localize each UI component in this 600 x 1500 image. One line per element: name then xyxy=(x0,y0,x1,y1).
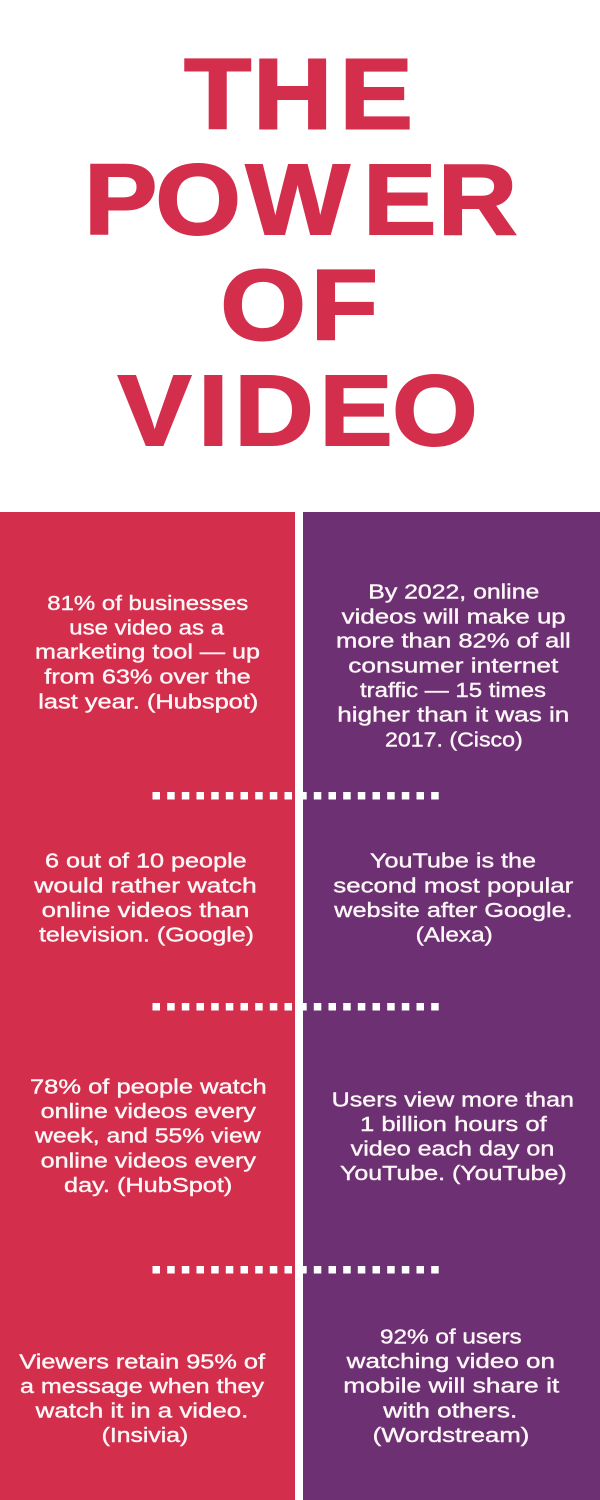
stat: businesses using video: marketing tool — up xyxy=(35,640,260,664)
title: OF xyxy=(220,250,378,361)
stat: rather watch online videos: would rather watch xyxy=(33,874,257,898)
stat: hours viewed on YouTube: 1 billion hours of xyxy=(360,1113,547,1136)
stat: weekly and daily viewers: online videos every xyxy=(41,1100,257,1123)
stat: hours viewed on YouTube: YouTube. (YouTube) xyxy=(340,1162,567,1185)
stat: rather watch online videos: online videos than xyxy=(42,899,249,922)
stat: businesses using video: last year. (Hubspot) xyxy=(38,690,258,713)
stat: weekly and daily viewers: online videos every xyxy=(41,1149,257,1172)
title: VIDEO xyxy=(118,356,478,467)
stat: message retention: watch it in a video. xyxy=(34,1400,248,1422)
stat: message retention: (Insivia) xyxy=(102,1424,188,1447)
stat: YouTube popularity: (Alexa) xyxy=(416,924,493,947)
stat: internet traffic by 2022: By 2022, online xyxy=(368,580,539,603)
stat: hours viewed on YouTube xyxy=(332,1088,574,1185)
stat: internet traffic by 2022: more than 82% of all xyxy=(336,630,571,653)
stat: businesses using video xyxy=(35,592,260,713)
stat: YouTube popularity: YouTube is the xyxy=(370,850,536,873)
title: THE xyxy=(184,39,413,150)
dotted divider 2 xyxy=(152,1003,439,1010)
stat: hours viewed on YouTube: video each day on xyxy=(351,1138,554,1161)
stat: businesses using video: from 63% over the xyxy=(44,665,251,688)
stat: weekly and daily viewers: week, and 55% view xyxy=(34,1125,261,1148)
stat: internet traffic by 2022: 2017. (Cisco) xyxy=(385,728,523,751)
stat: message retention: a message when they xyxy=(20,1375,265,1398)
stat: internet traffic by 2022: higher than it was in xyxy=(337,704,569,727)
dotted divider 1 xyxy=(152,792,439,800)
stat: internet traffic by 2022: videos will make up xyxy=(342,605,566,628)
stat: mobile sharing xyxy=(343,1325,560,1447)
stat: weekly and daily viewers: 78% of people watch xyxy=(30,1075,267,1098)
title: POWER xyxy=(84,145,517,256)
stat: businesses using video: use video as a xyxy=(69,616,225,640)
stat: weekly and daily viewers: day. (HubSpot) xyxy=(64,1174,232,1197)
stat: businesses using video: 81% of businesses xyxy=(47,592,248,615)
title xyxy=(84,39,517,467)
stat: mobile sharing: with others. xyxy=(382,1399,517,1422)
stat: mobile sharing: 92% of users xyxy=(380,1325,522,1348)
panel: right purple column xyxy=(303,512,600,1500)
stat: mobile sharing: watching video on xyxy=(345,1350,555,1373)
stat: internet traffic by 2022: traffic — 15 times xyxy=(360,679,546,702)
stat: mobile sharing: mobile will share it xyxy=(343,1375,560,1398)
dotted divider 3 xyxy=(152,1266,439,1274)
stat: rather watch online videos: television. (Google) xyxy=(39,924,254,947)
stat: YouTube popularity xyxy=(333,850,573,947)
stat: hours viewed on YouTube: Users view more than xyxy=(332,1088,574,1111)
stat: YouTube popularity: second most popular xyxy=(333,874,573,898)
stat: mobile sharing: (Wordstream) xyxy=(373,1424,529,1447)
stat: message retention: Viewers retain 95% of xyxy=(19,1350,265,1373)
stat: internet traffic by 2022 xyxy=(336,580,571,751)
stat: message retention xyxy=(19,1350,265,1447)
stat: internet traffic by 2022: consumer internet xyxy=(348,654,559,677)
stat: weekly and daily viewers xyxy=(30,1075,267,1197)
panel: left red column xyxy=(0,512,295,1500)
stat: rather watch online videos: 6 out of 10 people xyxy=(45,850,247,873)
stat: rather watch online videos xyxy=(33,850,257,947)
stat: YouTube popularity: website after Google. xyxy=(333,899,573,922)
